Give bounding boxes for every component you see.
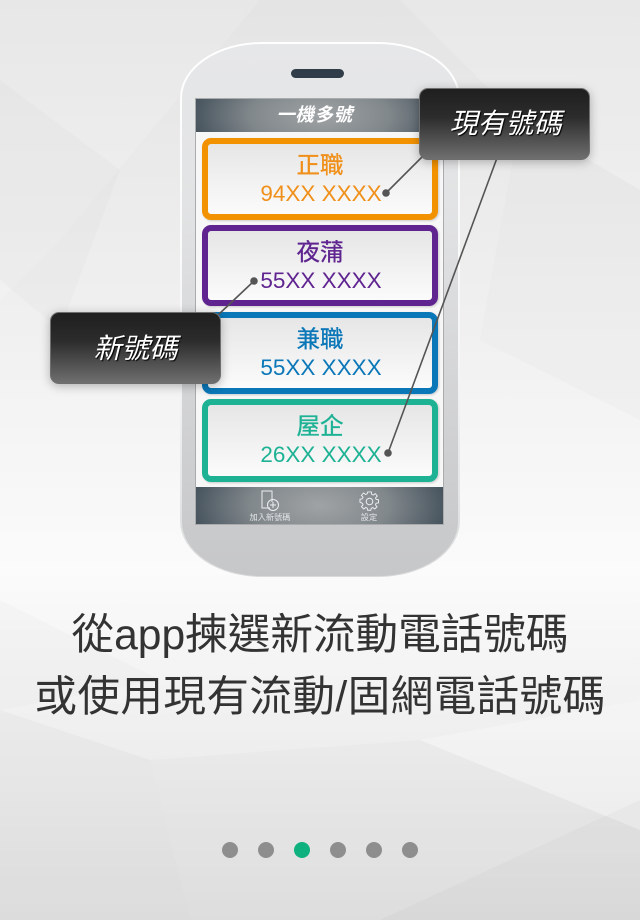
tab label: 加入新號碼: 加入新號碼 [250, 513, 290, 522]
card: 兼職: 55XX XXXX [260, 355, 382, 380]
card: 屋企: 26XX XXXX [260, 442, 382, 467]
callout: 現有號碼 [419, 88, 590, 160]
headline line 2: 或使用現有流動/固網電話號碼 [34, 673, 606, 721]
card: 夜蒲: 55XX XXXX [260, 268, 382, 293]
card: 兼職 [202, 312, 438, 394]
bottom tab bar [196, 487, 443, 524]
phone speaker [291, 69, 344, 78]
card: 屋企: 屋企 [296, 413, 344, 439]
pagination dots [222, 842, 418, 858]
icon: settings gear [360, 492, 379, 511]
callout: 現有號碼: 現有號碼 [449, 108, 562, 139]
callout: 新號碼 [50, 312, 221, 384]
card: 夜蒲 [202, 225, 438, 306]
app header: 一機多號: 一機多號 [276, 104, 353, 125]
phone screen [195, 98, 444, 525]
card: 正職: 正職 [296, 152, 344, 178]
card: 正職: 94XX XXXX [260, 181, 382, 206]
icon: add new number [262, 490, 279, 511]
card: 屋企 [202, 399, 438, 482]
app header: 一機多號 [196, 99, 443, 132]
card: 正職 [202, 138, 438, 220]
tab label: 設定: 設定 [361, 513, 377, 522]
card: 兼職: 兼職 [296, 326, 344, 352]
card: 夜蒲: 夜蒲 [296, 239, 344, 265]
callout: 新號碼: 新號碼 [93, 333, 178, 364]
phone body [180, 42, 460, 577]
headline line 1: 從app揀選新流動電話號碼 [71, 611, 568, 659]
